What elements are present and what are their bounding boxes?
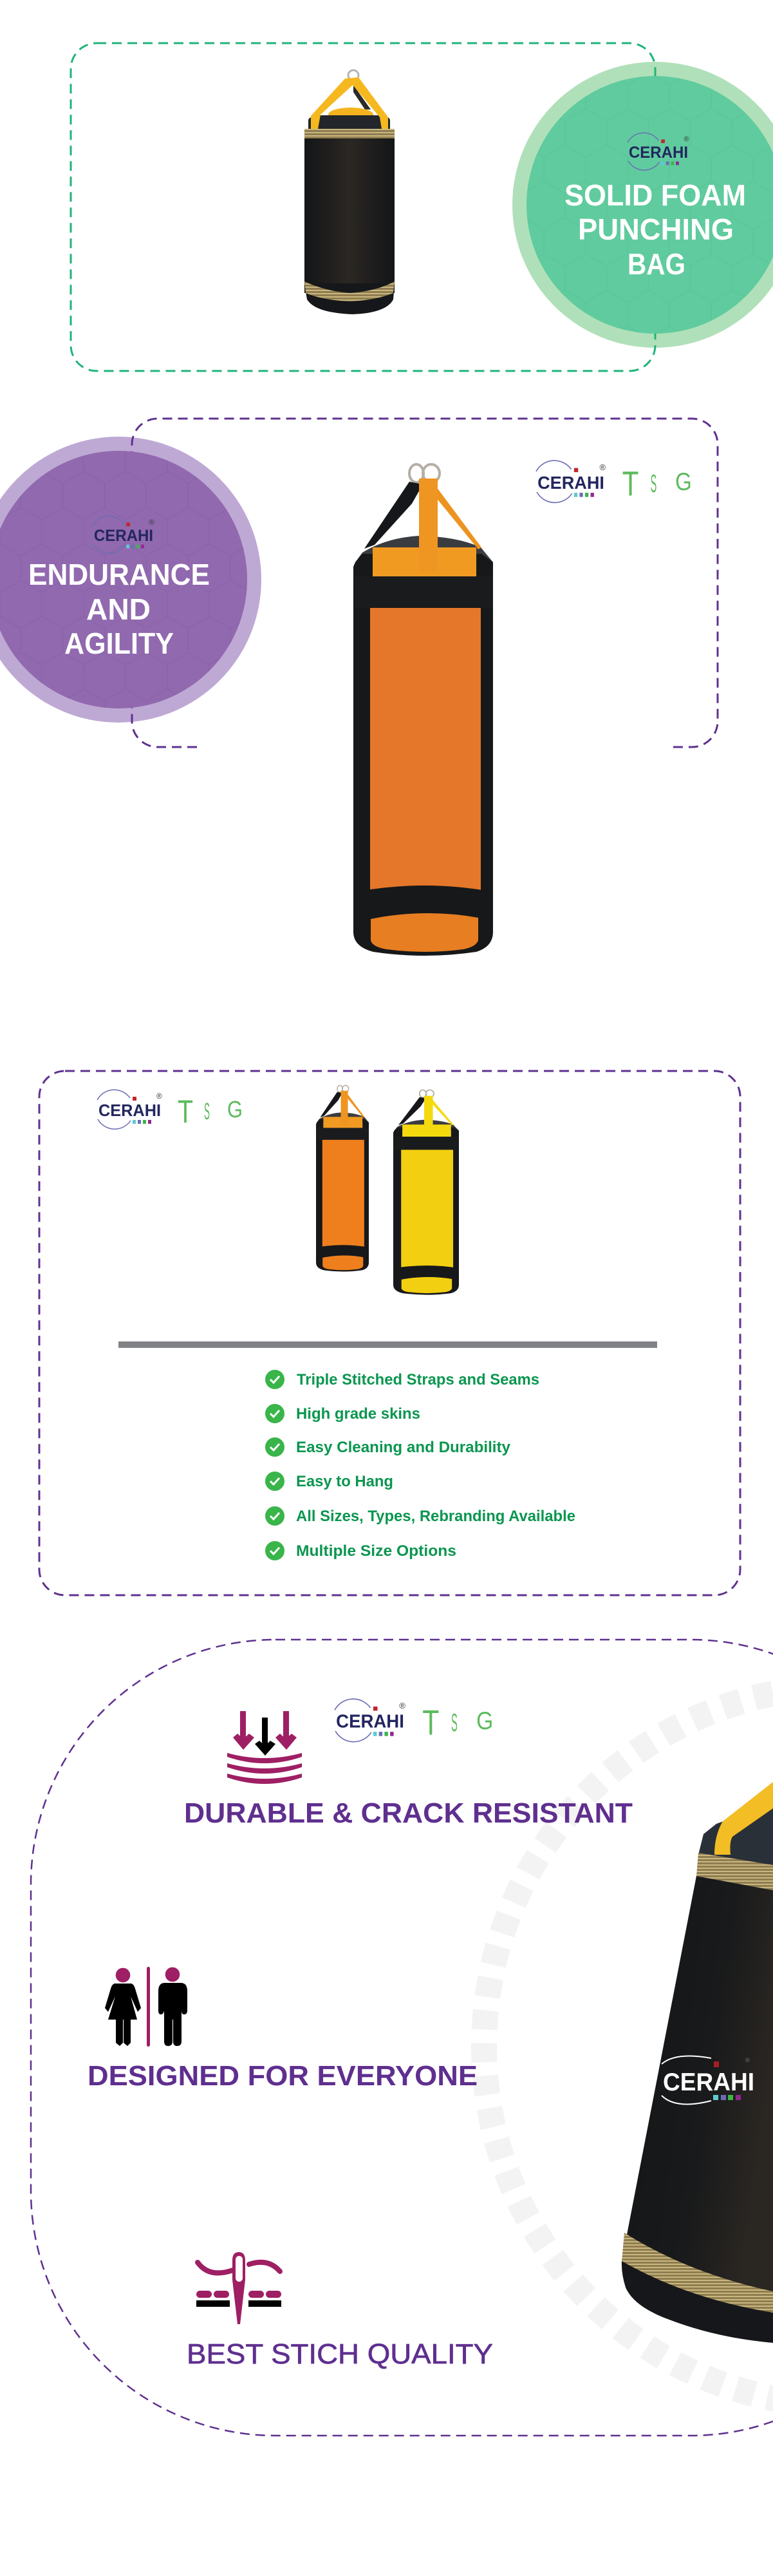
heading: solid foam punching bag: PUNCHING	[578, 213, 734, 246]
heading: durable and crack resistant: DURABLE & CRACK RESISTANT	[184, 1797, 633, 1829]
item: triple stitched straps and seams: Triple Stitched Straps and Seams	[297, 1371, 539, 1388]
heading: solid foam punching bag	[564, 178, 746, 281]
purple dashed rounded frame	[31, 1640, 773, 2436]
item: easy to hang	[265, 1472, 393, 1491]
panel: durability and quality	[31, 1640, 773, 2436]
item: easy to hang: Easy to Hang	[296, 1473, 393, 1490]
logo: cerahi tsg	[97, 1090, 243, 1130]
orange punching bag	[353, 464, 493, 956]
logo: cerahi tsg: T	[178, 1094, 193, 1130]
icon: needle and stitches	[196, 2252, 281, 2324]
logo: cerahi	[628, 133, 689, 170]
logo: cerahi tsg: S	[204, 1098, 210, 1124]
panel: features list	[39, 1071, 740, 1595]
logo: cerahi tsg	[536, 460, 692, 504]
purple inner circle	[0, 451, 247, 708]
icon: compression arrows	[227, 1711, 302, 1784]
green dashed frame	[71, 43, 655, 371]
panel: solid foam punching bag	[71, 43, 773, 371]
purple dashed frame	[39, 1071, 740, 1595]
item: high grade skins: High grade skins	[296, 1405, 420, 1423]
green inner circle	[526, 76, 773, 334]
icon: woman and man	[105, 1967, 187, 2047]
heading: solid foam punching bag: SOLID FOAM	[564, 178, 746, 212]
heading: best stich quality: BEST STICH QUALITY	[187, 2338, 493, 2370]
logo: white cerahi on bag	[662, 2056, 754, 2104]
logo: cerahi tsg	[335, 1699, 493, 1743]
logo: cerahi tsg: S	[451, 1709, 458, 1737]
logo: cerahi tsg: ®	[399, 1701, 405, 1710]
logo: cerahi tsg: ®	[156, 1092, 162, 1101]
item: all sizes, types, rebranding available: All Sizes, Types, Rebranding Available	[296, 1508, 575, 1525]
heading: endurance and agility: AND	[86, 592, 151, 626]
logo: cerahi: ®	[149, 518, 154, 526]
green outer circle	[512, 62, 773, 348]
logo: cerahi tsg: G	[675, 468, 692, 496]
heading: endurance and agility: ENDURANCE	[28, 558, 210, 591]
yellow small bag	[393, 1090, 459, 1295]
logo: cerahi tsg: CERAHI	[336, 1712, 404, 1732]
large black bag cropped	[622, 1782, 773, 2343]
logo: cerahi tsg: CERAHI	[537, 473, 604, 493]
heading: designed for everyone: DESIGNED FOR EVERYONE	[88, 2060, 478, 2092]
grey tick ring	[484, 1687, 773, 2405]
logo: cerahi tsg: S	[651, 470, 657, 498]
feature list	[265, 1370, 575, 1560]
purple dashed frame	[132, 419, 718, 747]
orange small bag	[316, 1085, 369, 1272]
logo: cerahi: CERAHI	[629, 144, 688, 162]
logo: cerahi tsg: G	[476, 1707, 493, 1735]
logo: cerahi tsg: CERAHI	[98, 1101, 161, 1120]
logo: white cerahi on bag: ®	[745, 2057, 750, 2063]
black punching bag with yellow straps	[304, 70, 395, 314]
grey divider bar	[118, 1341, 657, 1348]
heading: endurance and agility: AGILITY	[64, 627, 174, 660]
item: easy cleaning and durability: Easy Cleaning and Durability	[296, 1439, 511, 1456]
item: multiple size options: Multiple Size Options	[296, 1542, 456, 1560]
logo: cerahi tsg: T	[422, 1703, 439, 1743]
logo: cerahi tsg: G	[227, 1096, 243, 1122]
heading: endurance and agility	[28, 558, 210, 660]
panel: endurance and agility	[0, 419, 718, 956]
logo: white cerahi on bag: CERAHI	[663, 2069, 754, 2096]
logo: cerahi tsg: T	[622, 466, 638, 503]
logo: cerahi tsg: ®	[599, 462, 606, 472]
logo: cerahi: ®	[684, 135, 689, 143]
logo: cerahi	[93, 516, 154, 553]
purple outer circle	[0, 437, 261, 723]
heading: solid foam punching bag: BAG	[628, 247, 685, 281]
logo: cerahi: CERAHI	[94, 527, 153, 545]
